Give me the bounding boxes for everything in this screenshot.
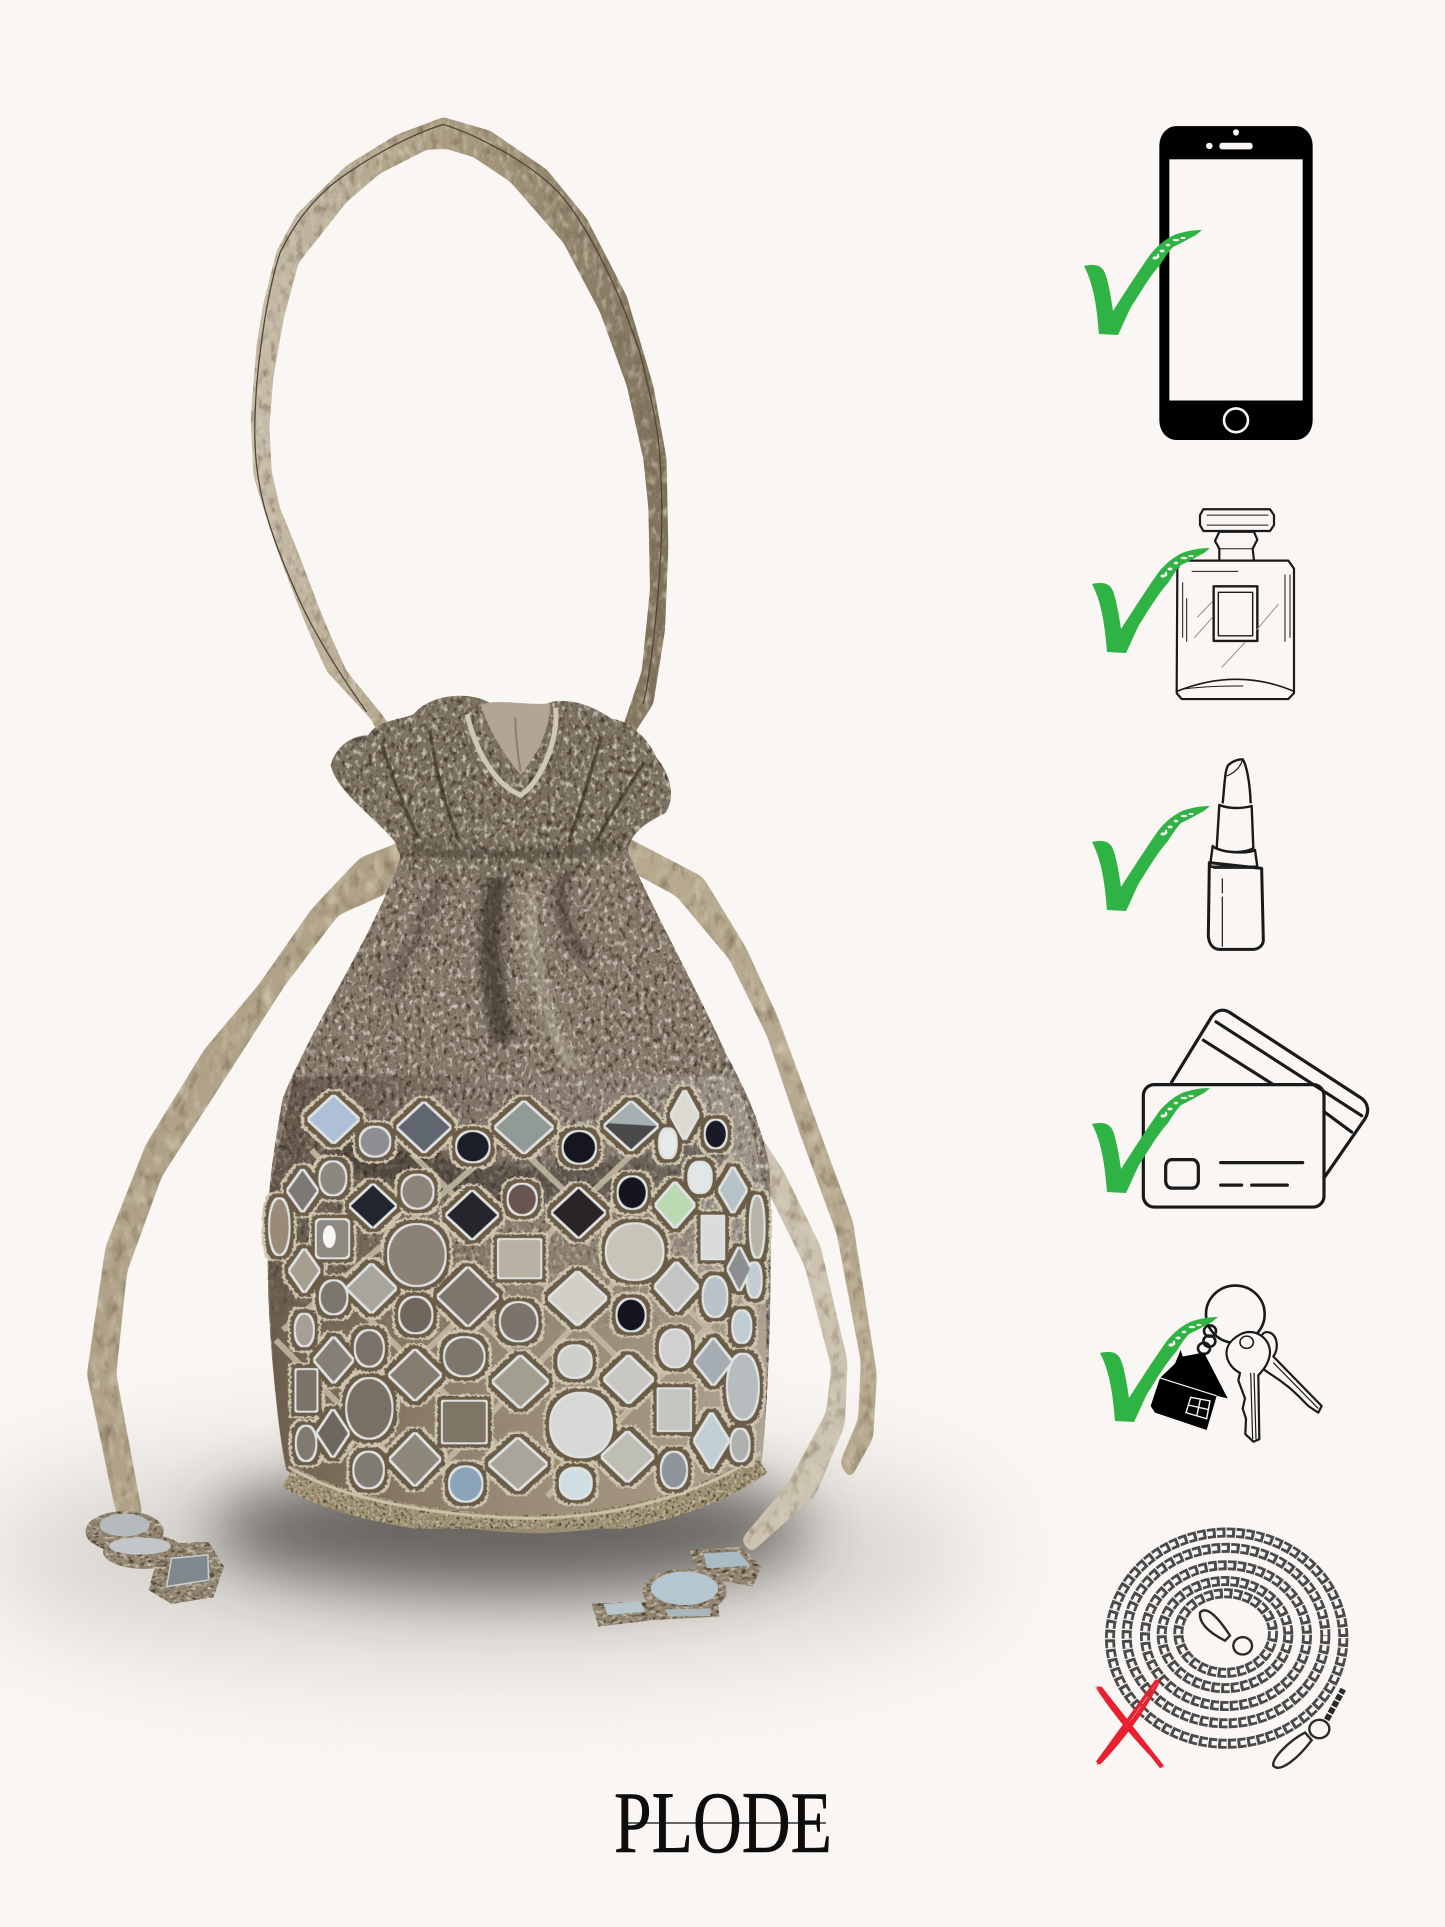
icon: house keychain with keys and check	[1100, 1286, 1322, 1442]
embroidered lattice lines	[276, 1150, 758, 1497]
red cross	[1095, 1679, 1164, 1769]
right mirror tassel	[592, 1547, 762, 1627]
bag handle	[251, 117, 668, 763]
bag body lace upper	[268, 851, 771, 1533]
bag ground shadow	[0, 1450, 980, 1660]
icon: phone with check	[1084, 126, 1313, 440]
icon: chain strap with red cross	[1095, 1533, 1343, 1769]
embroidered rope border	[288, 1453, 761, 1527]
bag lining opening	[481, 702, 550, 775]
right drawstrings	[617, 832, 877, 1553]
icon: perfume bottle with check	[1092, 509, 1294, 699]
bag gathered neck and ruffle	[331, 696, 671, 878]
mirror work	[270, 1092, 764, 1501]
lace fold shading	[339, 851, 724, 1183]
icon: credit cards with check	[1092, 1010, 1368, 1207]
left mirror tassel	[85, 1511, 224, 1604]
velvet lower body	[268, 1077, 766, 1533]
icon: lipstick with check	[1092, 759, 1263, 949]
left drawstring	[87, 832, 424, 1518]
logo: PLODE: PLODE	[614, 1775, 832, 1872]
